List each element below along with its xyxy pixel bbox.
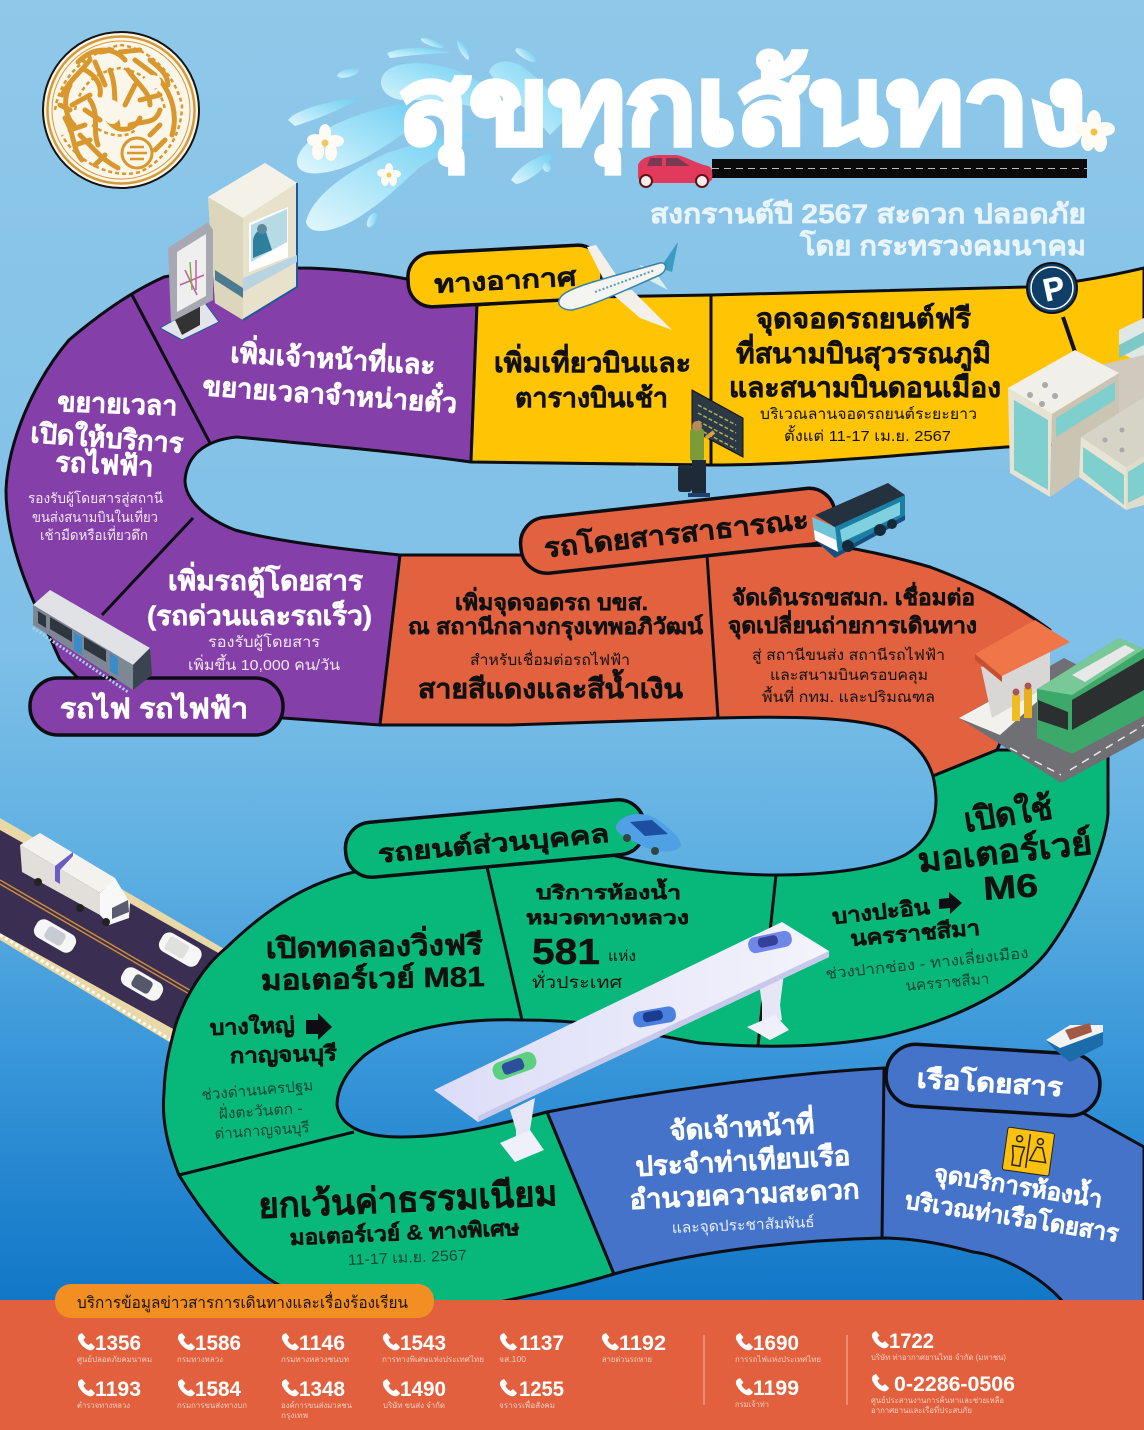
footer heading pill: บริการข้อมูลข่าวสารการเดินทางและเรื่องร้องเรียน [77,1291,408,1313]
hotline numbers: การรถไฟแห่งประเทศไทย [735,1355,821,1364]
hotline numbers: บริษัท ท่าอากาศยานไทย จำกัด (มหาชน) [871,1353,1006,1362]
title: สุขทุกเส้นทาง [398,45,1086,174]
text: fee waiver [258,1174,558,1269]
hotline numbers: กรุงเทพ [281,1411,308,1420]
hotline numbers: 1490 [400,1378,446,1401]
text: toilets: 581 [532,931,600,972]
text: BMTA connections: จุดเปลี่ยนถ่ายการเดินทาง [728,609,977,640]
text: BMTA connections: และสนามบินครอบคลุม [770,667,928,685]
text: more flights: ตารางบินเช้า [515,383,668,413]
text: M6 opening: M6 [982,866,1039,907]
text: more passenger cars: รองรับผู้โดยสาร [208,633,320,651]
tag: rail [30,678,283,735]
hotline numbers: 1137 [519,1332,564,1355]
icon: toilet sign [1002,1127,1055,1176]
subtitle: โดย กระทรวงคมนาคม [799,229,1086,261]
text: more bus parking: ณ สถานีกลางกรุงเทพอภิวัฒน์ [408,614,703,641]
text: pier staff [629,1104,860,1238]
hotline numbers: กรมทางหลวงชนบท [281,1355,349,1364]
text: M81 trial [201,924,485,1144]
footer heading pill [55,1284,434,1318]
icon: plumeria flowers [307,110,1115,186]
hotline numbers: บริษัท ขนส่ง จำกัด [383,1401,445,1410]
panel: rail section (purple) [6,267,477,725]
hotline numbers: จราจรเพื่อสังคม [499,1399,555,1410]
text: pier staff: อำนวยความสะดวก [629,1174,860,1215]
hotline numbers: 1193 [95,1378,141,1401]
illustration: ticket kiosk and map stand [160,163,297,340]
illustration: bridge with cars [434,922,829,1162]
text: toilets: หมวดทางหลวง [526,908,689,929]
hotline numbers: ศูนย์ปลอดภัยคมนาคม [77,1354,152,1365]
tag: boat [884,1043,1102,1117]
text: M81 trial: เปิดทดลองวิ่งฟรี [265,924,483,964]
text: M6 opening [824,787,1094,995]
hotline numbers: 1192 [619,1332,666,1355]
icon: arrow [306,1013,332,1040]
tag: rail: รถไฟ รถไฟฟ้า [60,692,248,724]
text: free airport parking: และสนามบินดอนเมือง [729,372,1001,403]
text: extended electric train hours: ขนส่งสนามบินในเที่ยว [32,508,158,525]
text: more bus parking: สำหรับเชื่อมต่อรถไฟฟ้า [470,649,630,669]
hotline numbers: 0-2286-0506 [894,1373,1015,1396]
text: more staff and ticket hours: เพิ่มเจ้าหน้าที่และ [230,333,436,381]
illustration: bus stop and green bus [959,620,1144,783]
hotline numbers [77,1330,1015,1420]
text: free airport parking: ตั้งแต่ 11-17 เม.ย. 2567 [784,425,951,445]
hotline numbers: องค์การขนส่งมวลชน [281,1400,353,1410]
text: free airport parking: ที่สนามบินสุวรรณภูมิ [736,333,991,371]
tag: public bus: รถโดยสารสาธารณะ [542,502,810,563]
text: more flights: เพิ่มเที่ยวบินและ [494,343,691,378]
text: free airport parking: จุดจอดรถยนต์ฟรี [756,303,971,336]
text: M81 trial: ฝั่งตะวันตก - [218,1097,303,1123]
text: more passenger cars: เพิ่มขึ้น 10,000 คน/วัน [188,654,340,674]
text: fee waiver: มอเตอร์เวย์ & ทางพิเศษ [289,1216,520,1250]
text: toilets: บริการห้องน้ำ [536,878,681,904]
text: pier toilets [903,1154,1121,1248]
cars on highway [31,916,205,1004]
panel: public bus section (orange) [380,545,1050,776]
text: M6 opening: นครราชสีมา [849,916,981,951]
text: fee waiver: 11-17 เม.ย. 2567 [347,1247,467,1269]
tag: private car [343,798,647,879]
tag: boat: เรือโดยสาร [916,1062,1064,1102]
text: BMTA connections: สู่ สถานีขนส่ง สถานีรถไฟฟ้า [752,646,945,664]
text: M81 trial: ช่วงด่านนครปฐม [201,1077,314,1104]
subtitle: สงกรานต์ปี 2567 สะดวก ปลอดภัย [650,198,1086,229]
text: pier toilets: จุดบริการห้องน้ำ [932,1154,1105,1215]
text: more bus parking: เพิ่มจุดจอดรถ บขส. [455,586,648,617]
illustration: red car on road [638,155,1087,187]
tag: air travel [407,244,603,308]
text: M81 trial: มอเตอร์เวย์ M81 [261,961,485,996]
panel: boat section (blue) [547,1068,1144,1303]
text: extended electric train hours: เช้ามืดหรือเที่ยวดึก [40,526,148,543]
illustration: airport buildings [1008,318,1144,510]
text: extended electric train hours [28,387,185,543]
illustration: blue bus [812,483,905,558]
text: more bus parking [408,586,703,704]
logo: ministry seal [43,32,199,188]
text: pier staff: จัดเจ้าหน้าที่ [669,1104,815,1146]
hotline numbers: 1722 [889,1330,934,1353]
hotline numbers: 1584 [195,1378,241,1401]
text: M81 trial: บางใหญ่ [209,1012,295,1041]
hotline numbers: การทางพิเศษแห่งประเทศไทย [382,1355,484,1364]
hotline numbers: กรมการขนส่งทางบก [177,1401,247,1410]
text: more passenger cars: เพิ่มรถตู้โดยสาร [168,561,364,598]
text: more staff and ticket hours [202,333,458,419]
text: M81 trial: กาญจนบุรี [230,1041,338,1070]
subtitle [650,198,1086,261]
hotline numbers: 1543 [400,1332,446,1355]
text: BMTA connections: พื้นที่ กทม. และปริมณฑล [762,686,935,706]
text: pier staff: ประจำท่าเทียบเรือ [635,1141,851,1182]
hotline numbers: สายด่วนรถหาย [602,1355,652,1364]
car: purple blue [747,930,793,954]
panel: air section (yellow) [471,268,1144,465]
car: green [490,1050,539,1082]
illustration: blue car [616,814,681,855]
text: free airport parking [729,303,1001,445]
text: M6 opening: ช่วงปากช่อง - ทางเลี่ยงเมือง [824,942,1029,983]
icon: arrow [939,892,962,914]
hotline numbers: 1199 [753,1377,799,1400]
panel: contact footer [0,1284,1144,1430]
text: BMTA connections: จัดเดินรถขสมก. เชื่อมต่อ [732,581,975,610]
tag: public bus [518,486,838,576]
tag: private car: รถยนต์ส่วนบุคคล [377,819,611,871]
text: more bus parking: สายสีแดงและสีน้ำเงิน [418,668,684,704]
text: pier staff: และจุดประชาสัมพันธ์ [671,1214,815,1238]
text: extended electric train hours: เปิดให้บริการ [30,417,185,459]
truck [20,833,130,926]
illustration: train [33,590,152,692]
text: pier toilets: บริเวณท่าเรือโดยสาร [903,1185,1121,1248]
text: toilets: แห่ง [608,948,636,965]
hotline numbers: จส.100 [499,1355,527,1364]
illustration: water splash [288,36,572,231]
hotline numbers: อากาศยานและเรือที่ประสบภัย [871,1404,972,1415]
illustration: parking sign: P [1040,269,1068,308]
text: more staff and ticket hours: ขยายเวลาจำหน่ายตั๋ว [202,365,458,419]
text: extended electric train hours: รองรับผู้โดยสารสู่สถานี [28,490,163,507]
text: BMTA connections [728,581,977,706]
illustration: boat [1046,1023,1103,1062]
illustration: flight board and traveller [678,390,743,495]
text: free airport parking: บริเวณลานจอดรถยนต์ระยะยาว [760,406,977,423]
text: M81 trial: ด่านกาญจนบุรี [214,1119,310,1144]
text: M6 opening: นครราชสีมา [905,971,990,995]
panel: private car section (green) [163,750,1108,1302]
illustration: parking sign [1027,263,1077,352]
text: more passenger cars [147,561,372,674]
hotline numbers: 1586 [195,1332,241,1355]
tag: air travel: ทางอากาศ [434,263,578,299]
text: extended electric train hours: ขยายเวลา [57,387,178,421]
text: extended electric train hours: รถไฟฟ้า [55,446,154,482]
text: M6 opening: มอเตอร์เวย์ [916,824,1094,879]
car: blue [632,1005,677,1029]
hotline numbers: 1348 [299,1378,345,1401]
hotline numbers: 1255 [519,1378,564,1401]
hotline numbers: 1146 [299,1332,345,1355]
hotline numbers: กรมเจ้าท่า [735,1400,769,1409]
text: more flights [494,343,691,413]
text: toilets [526,878,689,992]
text: more passenger cars: (รถด่วนและรถเร็ว) [147,598,372,631]
text: toilets: ทั่วประเทศ [532,970,622,992]
hotline numbers: ศูนย์ประสานงานการค้นหาและช่วยเหลือ [871,1395,1004,1406]
hotline numbers: 1690 [753,1332,799,1355]
text: M6 opening: เปิดใช้ [961,787,1055,839]
hotline numbers: กรมทางหลวง [177,1355,223,1364]
text: fee waiver: ยกเว้นค่าธรรมเนียม [258,1174,558,1226]
text: M6 opening: บางปะอิน [831,896,932,929]
hotline numbers: ตำรวจทางหลวง [77,1401,130,1410]
hotline numbers: 1356 [95,1332,141,1355]
illustration: highway at left [0,818,226,1043]
illustration: airplane [559,242,678,330]
